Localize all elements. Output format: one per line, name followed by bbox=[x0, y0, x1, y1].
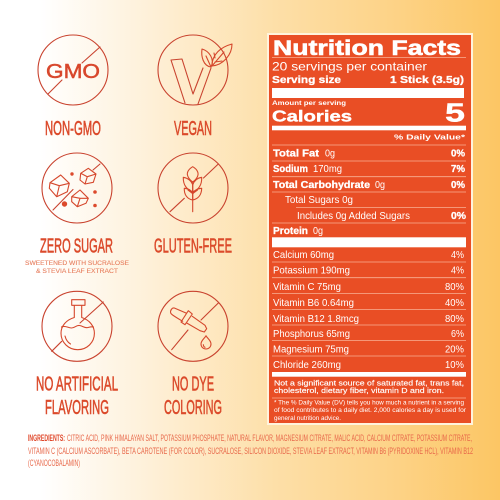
text: servings: 20 servings per container bbox=[272, 60, 427, 74]
row: chloride bbox=[273, 359, 464, 371]
text: daily value footnote: * The % Daily Value (DV) tells you how much a nutrient in a serving bbox=[274, 400, 464, 406]
icon: non-GMO bbox=[38, 35, 108, 105]
row: total fat: 0g bbox=[325, 148, 335, 160]
label: gluten-free: GLUTEN-FREE bbox=[154, 236, 232, 258]
label: non-GMO: NON-GMO bbox=[45, 118, 101, 140]
label: no artificial flavoring: NO ARTIFICIAL bbox=[36, 374, 118, 396]
row: total carbohydrate: 0g bbox=[375, 179, 385, 191]
row: vitamin B6: Vitamin B6 0.64mg bbox=[273, 297, 354, 309]
heading: nutrition facts: Nutrition Facts bbox=[273, 37, 461, 60]
row: sodium: Sodium bbox=[273, 163, 308, 175]
text: serving size bbox=[272, 74, 464, 86]
row: phosphorus: Phosphorus 65mg bbox=[273, 328, 350, 340]
icon: non-GMO: GMO bbox=[46, 61, 100, 83]
row: total fat: Total Fat bbox=[273, 148, 320, 160]
text: daily value footnote: general nutrition advice. bbox=[274, 415, 341, 422]
text: sweetener note: SWEETENED WITH SUCRALOSE bbox=[25, 261, 129, 267]
label: zero sugar: ZERO SUGAR bbox=[40, 236, 113, 258]
row: vitamin C bbox=[273, 281, 464, 293]
icon: vegan bbox=[158, 35, 232, 105]
text: calories: Calories bbox=[272, 109, 352, 126]
row: total carbohydrate bbox=[273, 179, 466, 191]
row: chloride: 10% bbox=[445, 359, 464, 371]
text: not a significant source: cholesterol, dietary fiber, vitamin D and iron. bbox=[274, 386, 444, 395]
text: sweetener note bbox=[25, 261, 129, 275]
row: magnesium: Magnesium 75mg bbox=[273, 344, 349, 356]
row: added sugars: 0% bbox=[451, 210, 467, 222]
row: potassium bbox=[273, 265, 464, 277]
text: daily value footnote: of food contributes to a daily diet. 2,000 calories a day is used for bbox=[274, 407, 467, 414]
row: vitamin B12 bbox=[273, 313, 464, 325]
label: no artificial flavoring: FLAVORING bbox=[45, 397, 109, 419]
row: sodium: 7% bbox=[451, 163, 466, 175]
text: calories bbox=[272, 98, 465, 128]
text: not a significant source: Not a significant source of saturated fat, trans fat, bbox=[274, 379, 464, 388]
text: calories: 5 bbox=[445, 98, 465, 128]
row: added sugars: Includes 0g Added Sugars bbox=[297, 210, 410, 222]
icon: no dye coloring dropper bbox=[158, 291, 228, 361]
label: no dye coloring: COLORING bbox=[164, 397, 222, 419]
label: no artificial flavoring bbox=[36, 374, 118, 419]
text: not a significant source bbox=[274, 379, 464, 395]
row: sodium: 170mg bbox=[313, 163, 342, 175]
row: magnesium bbox=[273, 344, 464, 356]
row: vitamin B6: 40% bbox=[445, 297, 464, 309]
row: vitamin C: Vitamin C 75mg bbox=[273, 281, 341, 293]
text: serving size: 1 Stick (3.5g) bbox=[390, 74, 464, 86]
text: sweetener note: & STEVIA LEAF EXTRACT bbox=[36, 269, 118, 275]
text: amount per serving: Amount per serving bbox=[272, 100, 346, 107]
row: total fat: 0% bbox=[451, 148, 466, 160]
row: magnesium: 20% bbox=[445, 344, 464, 356]
row: total carbohydrate: 0% bbox=[451, 179, 466, 191]
row: calcium: 4% bbox=[451, 249, 464, 261]
row: calcium: Calcium 60mg bbox=[273, 249, 334, 261]
icon: zero sugar cubes bbox=[42, 153, 112, 223]
text: serving size: Serving size bbox=[272, 74, 341, 86]
text: daily value footnote bbox=[274, 400, 467, 422]
text: daily value header: % Daily Value* bbox=[394, 132, 465, 142]
row: potassium: Potassium 190mg bbox=[273, 265, 350, 277]
row: protein: 0g bbox=[313, 225, 323, 237]
row: vitamin B6 bbox=[273, 297, 464, 309]
row: calcium bbox=[273, 249, 464, 261]
icon: no artificial flavoring flask bbox=[42, 291, 112, 361]
icon: gluten-free wheat bbox=[158, 153, 228, 223]
row: phosphorus bbox=[273, 328, 464, 340]
text: ingredients: (CYANOCOBALAMIN) bbox=[28, 458, 80, 469]
row: chloride: Chloride 260mg bbox=[273, 359, 341, 371]
row: vitamin C: 80% bbox=[445, 281, 464, 293]
row: total carbohydrate: Total Carbohydrate bbox=[273, 179, 370, 191]
label: vegan: VEGAN bbox=[174, 118, 212, 140]
row: total fat bbox=[273, 148, 466, 160]
row: vitamin B12: 80% bbox=[445, 313, 464, 325]
panel: nutrition facts bbox=[267, 33, 473, 425]
row: protein: Protein bbox=[273, 225, 308, 237]
row: vitamin B12: Vitamin B12 1.8mcg bbox=[273, 313, 359, 325]
row: sodium bbox=[273, 163, 466, 175]
text: ingredients: INGREDIENTS: bbox=[28, 433, 65, 444]
row: total sugars: Total Sugars 0g bbox=[285, 194, 353, 206]
label: no dye coloring: NO DYE bbox=[172, 374, 214, 396]
row: potassium: 4% bbox=[451, 265, 464, 277]
label: no dye coloring bbox=[164, 374, 222, 419]
text: ingredients bbox=[28, 433, 473, 469]
row: phosphorus: 6% bbox=[451, 328, 464, 340]
